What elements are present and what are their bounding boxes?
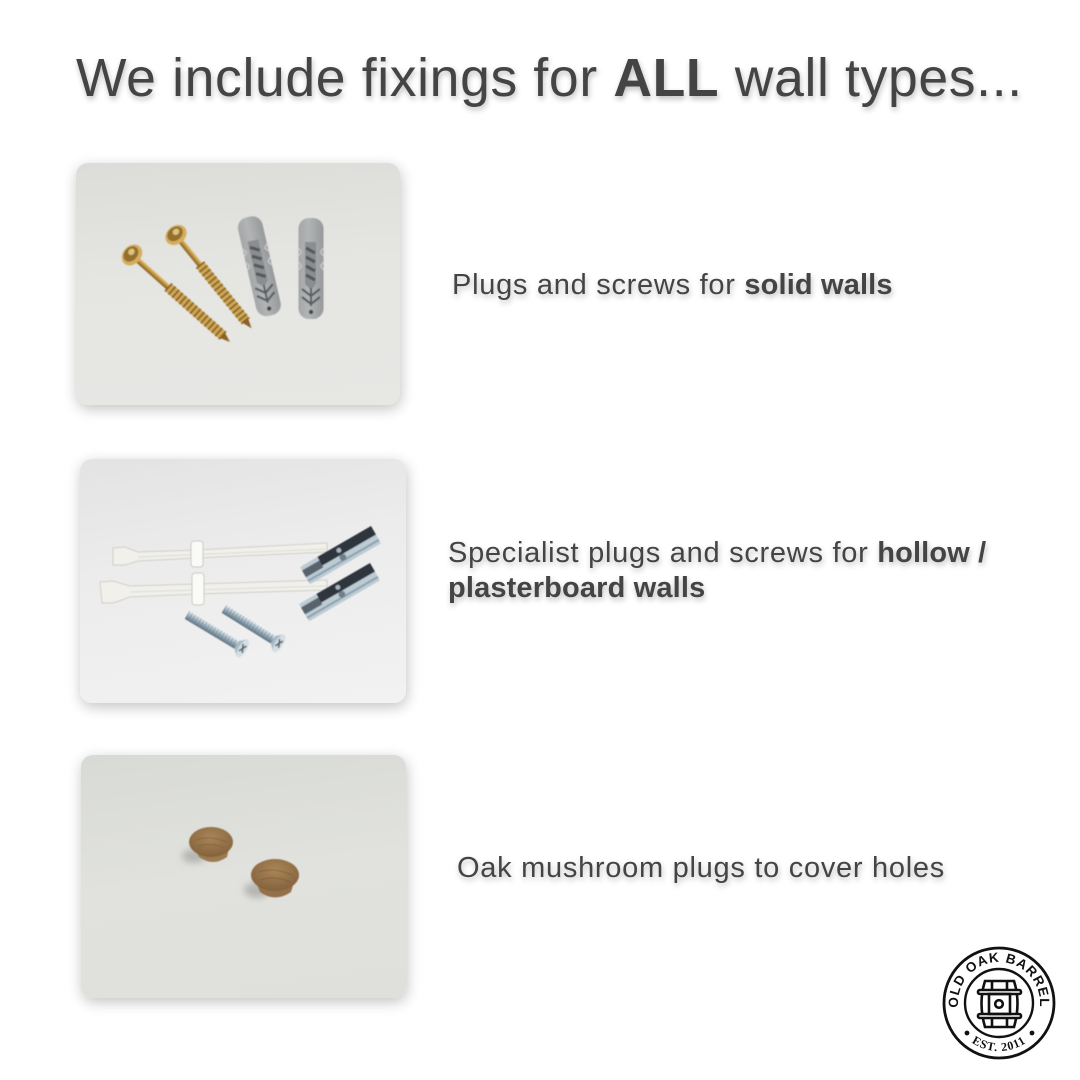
label: oak plugs: Oak mushroom plugs to cover holes [457, 852, 945, 884]
icon: metal toggle upper [300, 526, 381, 584]
logo: Old Oak Barrel badge [942, 946, 1056, 1060]
icon: oak plug left [182, 827, 233, 863]
icon: metal toggle lower [299, 563, 380, 621]
logo: Old Oak Barrel badge: EST. 2011 [972, 1036, 1026, 1052]
label: hollow walls: plasterboard walls [448, 572, 705, 604]
icon: brass screw back [161, 221, 260, 335]
icon: machine screw left [182, 606, 251, 659]
icon: oak plug right [244, 859, 299, 898]
icon: plastic strap lower [100, 573, 327, 605]
label: solid walls: Plugs and screws for solid walls [452, 269, 893, 301]
icon: grey wall plug right [298, 218, 324, 319]
icon: machine screw right [219, 601, 288, 654]
label: hollow walls [448, 537, 989, 608]
icon: barrel [978, 981, 1021, 1027]
icon: plastic strap upper [113, 541, 327, 567]
panel: oak plugs photo [81, 755, 406, 998]
logo: Old Oak Barrel badge: OLD OAK BARREL [948, 952, 1050, 1008]
title: We include fixings for ALL wall types... [76, 49, 1023, 108]
label: hollow walls: Specialist plugs and screws for hollow / [448, 537, 986, 569]
panel: hollow wall fixings photo [80, 459, 406, 703]
panel: solid wall fixings photo [76, 163, 400, 405]
icon: brass screw front [118, 240, 238, 351]
icon: grey wall plug left [236, 214, 283, 318]
